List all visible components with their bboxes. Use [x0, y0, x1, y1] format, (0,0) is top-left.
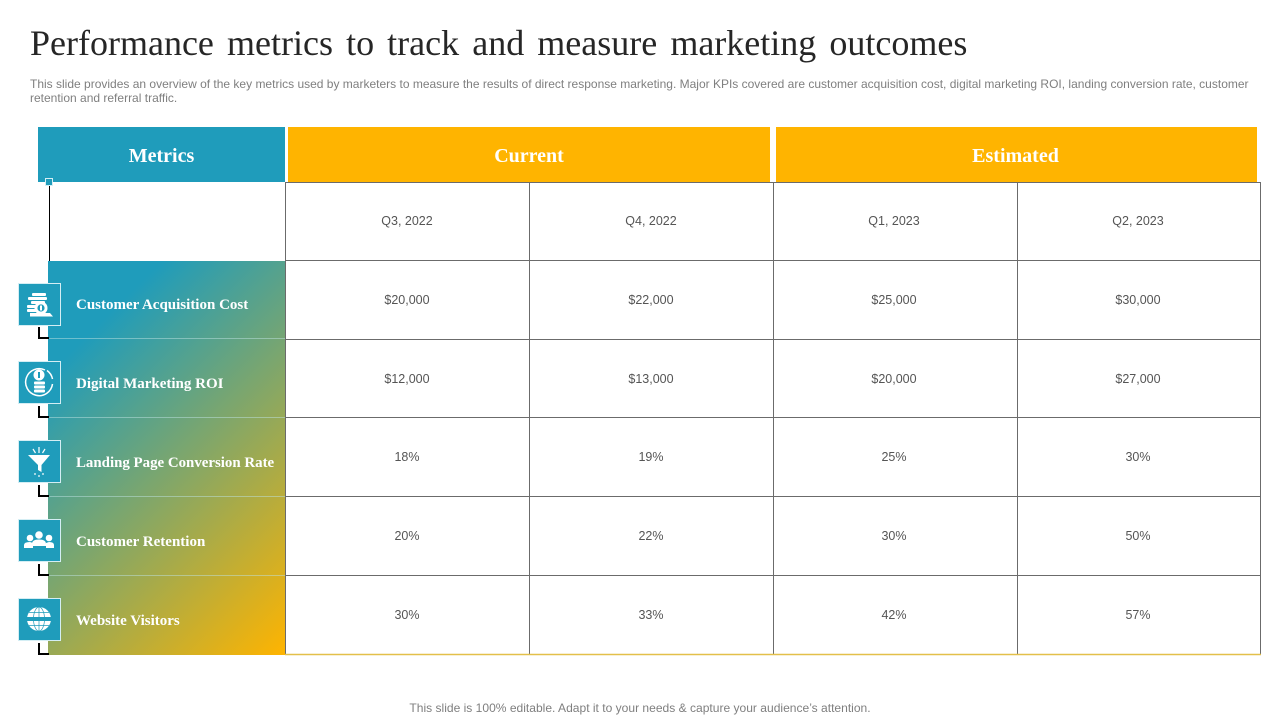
period row: Q2, 2023	[1112, 214, 1164, 228]
connector	[38, 485, 49, 497]
header: current: Current	[494, 145, 564, 167]
row: landing page conversion rate: 18%	[394, 450, 420, 464]
metrics gradient panel	[48, 261, 285, 655]
row: website visitors: 33%	[638, 608, 664, 622]
row: digital marketing roi: $20,000	[871, 372, 917, 386]
row: website visitors: 57%	[1125, 608, 1151, 622]
row: landing page conversion rate: 25%	[881, 450, 907, 464]
connector	[38, 643, 49, 655]
header: current	[288, 127, 770, 182]
row: website visitors	[18, 598, 1151, 655]
period row	[381, 214, 1164, 228]
label: Website Visitors	[76, 612, 180, 628]
label: Customer Retention	[76, 534, 205, 550]
connector	[38, 564, 49, 576]
period row: Q1, 2023	[868, 214, 920, 228]
icon: coins	[18, 283, 61, 326]
row: customer acquisition cost: $25,000	[871, 293, 917, 307]
period row: Q4, 2022	[625, 214, 677, 228]
header: estimated	[776, 127, 1257, 182]
row: customer acquisition cost: $30,000	[1115, 293, 1161, 307]
row: digital marketing roi: $13,000	[628, 372, 674, 386]
row: customer retention: 50%	[1125, 529, 1151, 543]
row: customer retention: 30%	[881, 529, 907, 543]
header: metrics	[38, 127, 285, 182]
icon: globe	[18, 598, 61, 641]
label: Customer Acquisition Cost	[76, 297, 248, 313]
label: Digital Marketing ROI	[76, 376, 224, 392]
row: customer retention: 20%	[394, 529, 420, 543]
row: digital marketing roi: $27,000	[1115, 372, 1161, 386]
row: website visitors: 30%	[394, 608, 420, 622]
label: Landing Page Conversion Rate	[76, 455, 274, 471]
connector	[38, 327, 49, 339]
row: landing page conversion rate: 19%	[638, 450, 664, 464]
icon: people	[18, 519, 61, 562]
row: website visitors: 42%	[881, 608, 907, 622]
header: metrics: Metrics	[129, 145, 194, 167]
row: customer retention: 22%	[638, 529, 664, 543]
header: estimated: Estimated	[972, 145, 1059, 167]
row: digital marketing roi: $12,000	[384, 372, 430, 386]
row: landing page conversion rate: 30%	[1125, 450, 1151, 464]
footer note: This slide is 100% editable. Adapt it to your needs & capture your audience’s attention.	[409, 701, 871, 715]
icon: coin cycle	[18, 361, 61, 404]
description text: This slide provides an overview of the key metrics used by marketers to measure the results of direct response marketing. Major KPIs covered are customer acquisition cost, digital marketing ROI, landing conversion rate, customer retention and referral traffic.	[30, 77, 1249, 105]
connector from metrics header	[45, 178, 53, 261]
period row: Q3, 2022	[381, 214, 433, 228]
row: customer acquisition cost: $22,000	[628, 293, 674, 307]
row: customer acquisition cost: $20,000	[384, 293, 430, 307]
row: landing page conversion rate	[18, 440, 1151, 497]
title: Performance metrics to track and measure marketing outcomes	[30, 23, 967, 63]
connector	[38, 406, 49, 418]
row: customer acquisition cost	[18, 283, 1161, 339]
icon: funnel	[18, 440, 61, 483]
row: customer retention	[18, 519, 1151, 576]
row: digital marketing roi	[18, 361, 1161, 418]
